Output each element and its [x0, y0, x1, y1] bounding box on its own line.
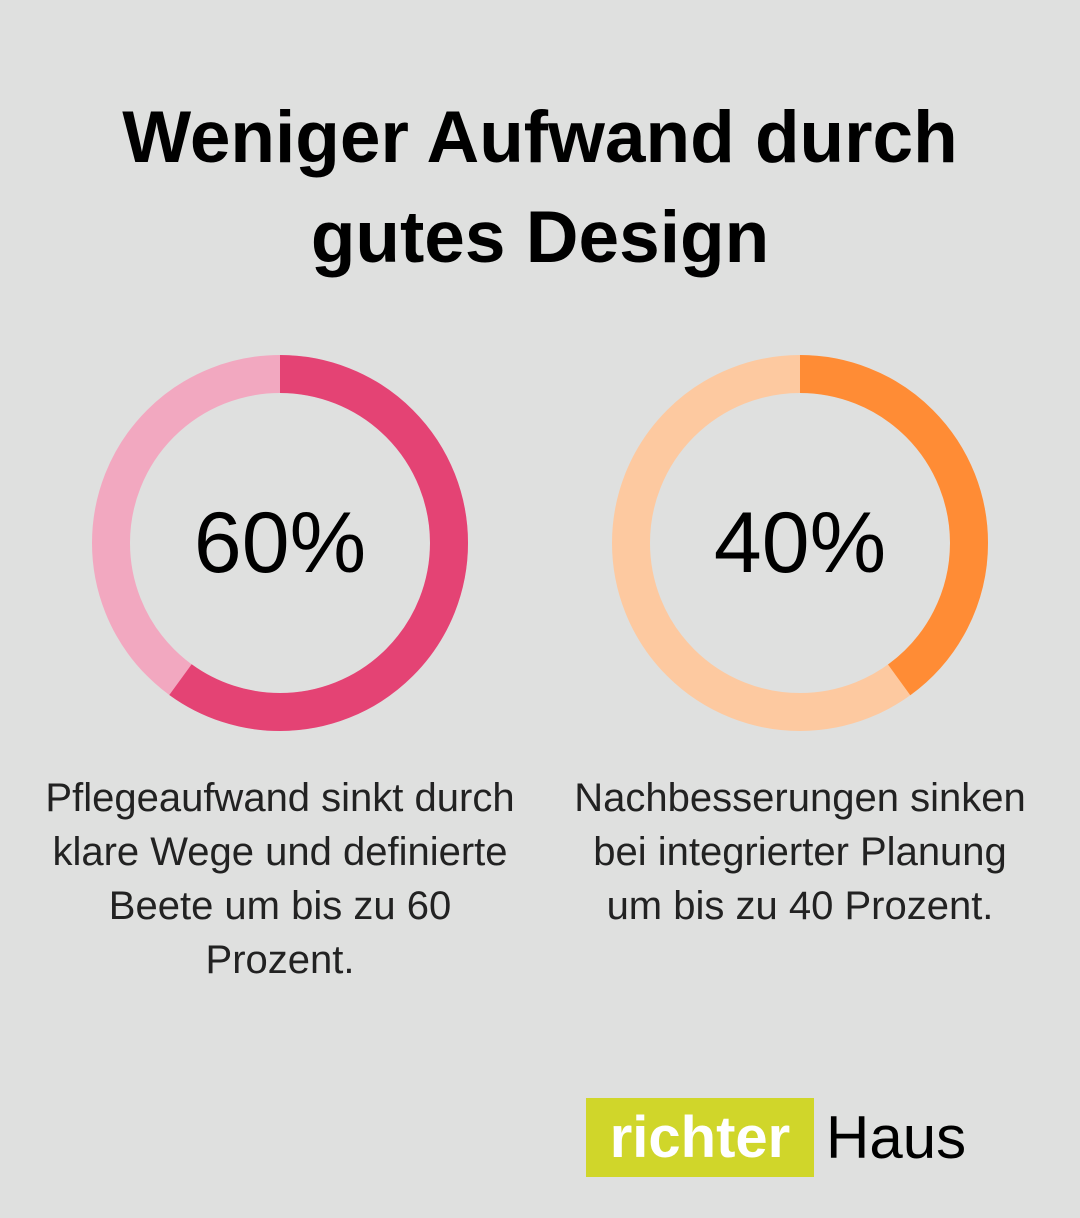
donut: 40%: 40% [714, 495, 886, 591]
text: left: Pflegeaufwand sinkt durch [45, 776, 515, 820]
text: right: um bis zu 40 Prozent. [607, 884, 993, 928]
donut: 40% [612, 355, 988, 731]
text: left: Beete um bis zu 60 [109, 884, 451, 928]
text: right: bei integrierter Planung [593, 830, 1007, 874]
text: left [45, 776, 515, 982]
text: right: Nachbesserungen sinken [574, 776, 1026, 820]
logo: richter [610, 1105, 790, 1170]
title: Weniger Aufwand durch [122, 97, 958, 178]
text: left: Prozent. [206, 938, 354, 982]
donut: 60% [92, 355, 468, 731]
text: right [574, 776, 1026, 928]
donut: 60%: 60% [194, 495, 366, 591]
title: gutes Design [311, 197, 769, 278]
text: left: klare Wege und definierte [52, 830, 508, 874]
logo [586, 1098, 966, 1177]
logo: Haus [826, 1104, 966, 1171]
title [122, 97, 958, 278]
